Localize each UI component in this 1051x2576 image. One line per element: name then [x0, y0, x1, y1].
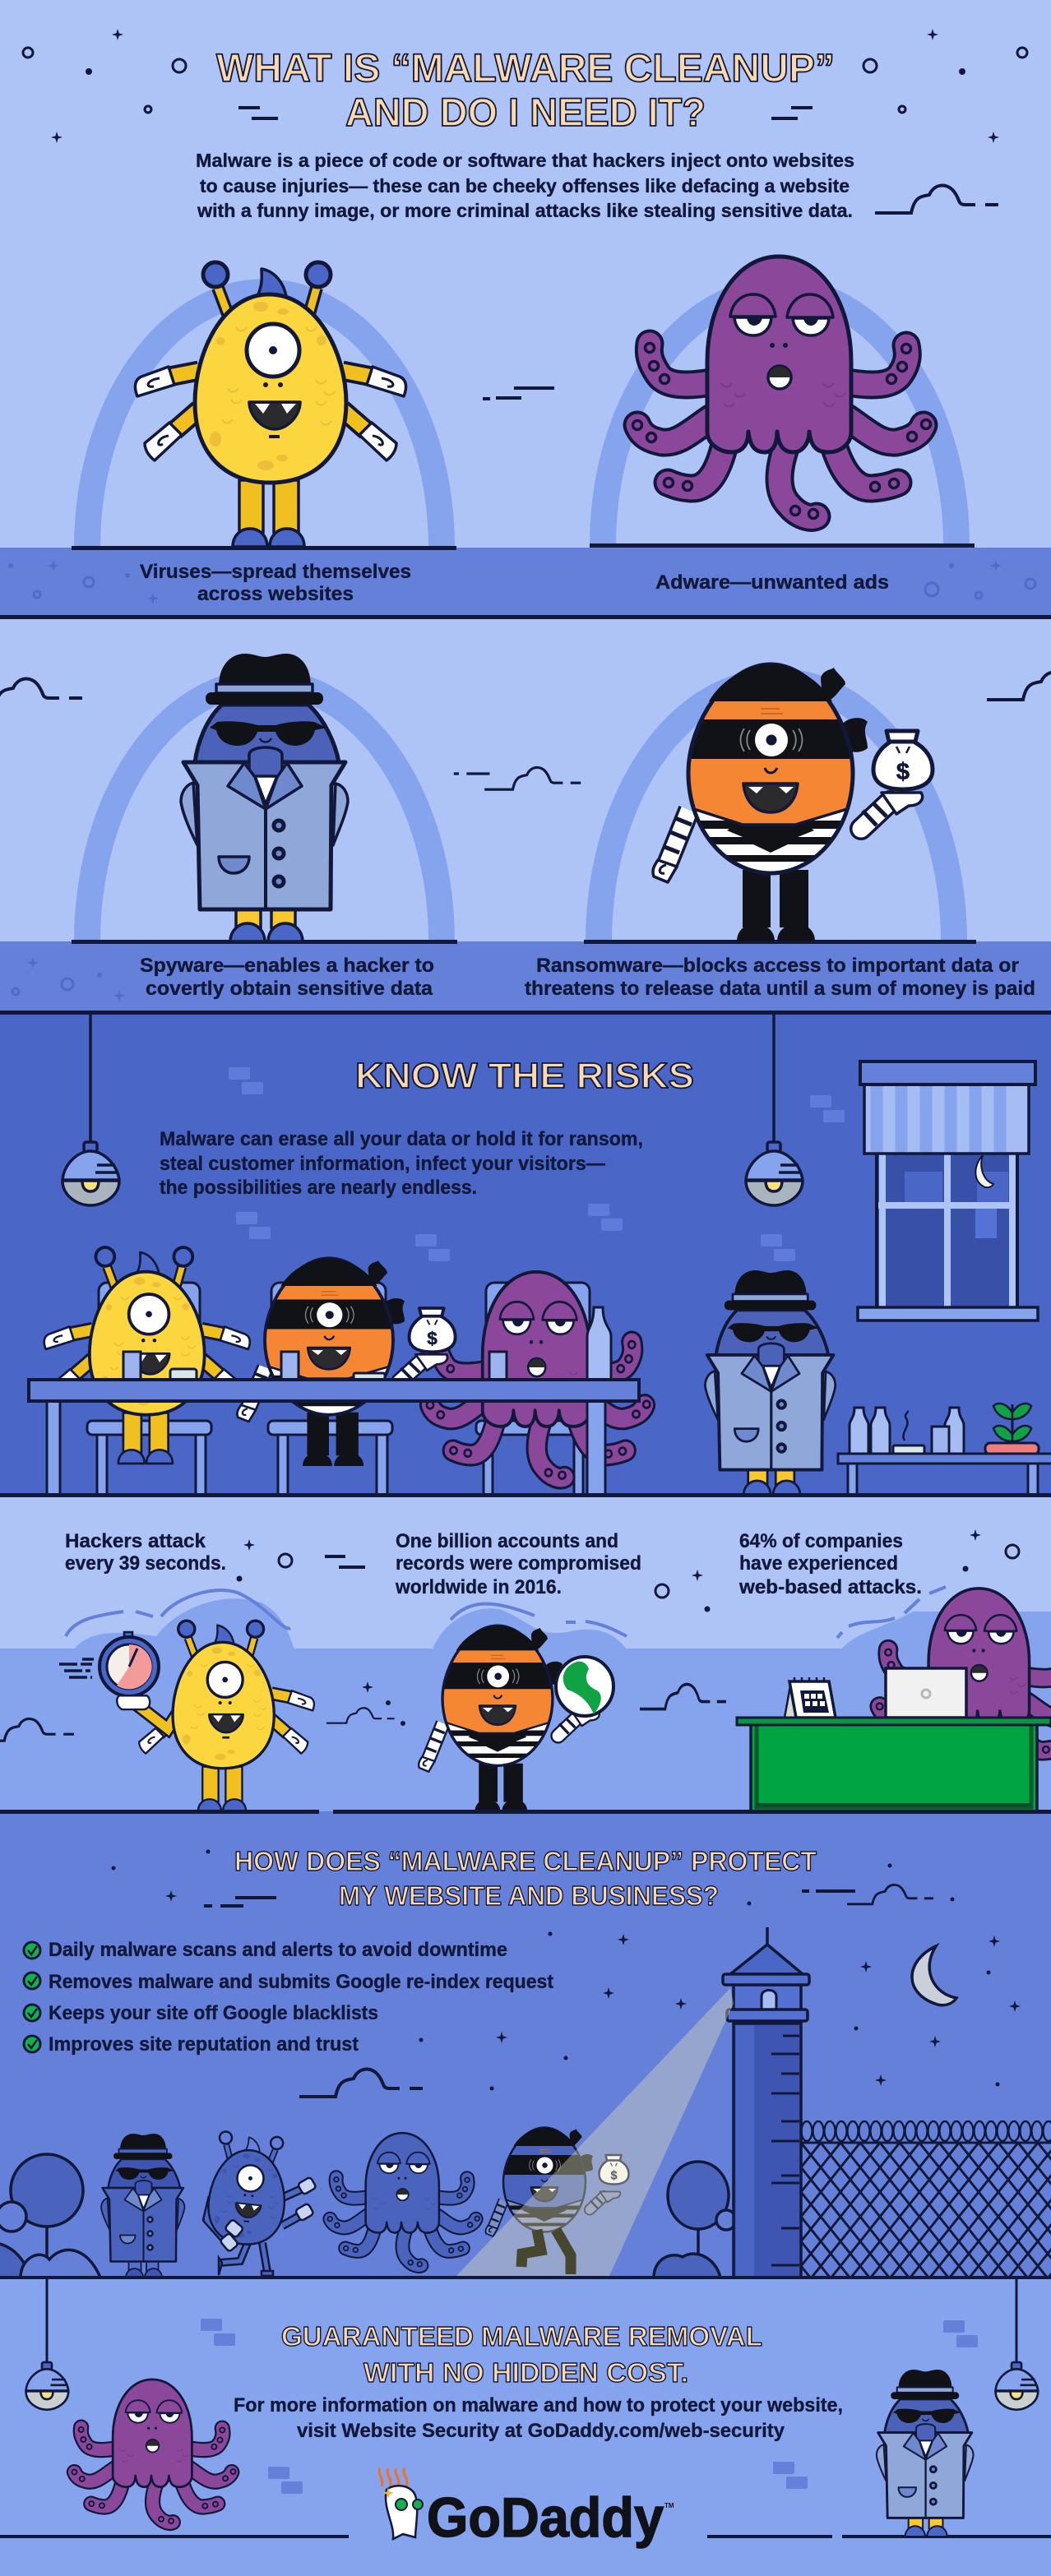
character: footer octopus	[72, 2379, 235, 2523]
character: spy	[181, 654, 348, 941]
GoDaddy logo: TM	[664, 2502, 674, 2509]
character: virus with stopwatch	[117, 1621, 314, 1811]
window	[858, 1061, 1038, 1320]
spotlight beam	[456, 1988, 734, 2276]
caption: ransomware	[525, 955, 1035, 1000]
band decoration	[8, 560, 1035, 1001]
footer text block	[234, 2394, 843, 2442]
chairs	[87, 1283, 590, 1495]
ground line: ransomware	[584, 940, 976, 944]
icon: clouds in night sky	[299, 1885, 933, 2097]
risks text block: steal customer information, infect your visitors—	[160, 1153, 605, 1175]
character: spy standing	[705, 1270, 836, 1495]
intro text block: Malware is a piece of code or software that hackers inject onto websites	[196, 150, 854, 171]
character: thief at table	[237, 1253, 456, 1466]
checklist	[24, 1939, 553, 2056]
heading: guaranteed removal: WITH NO HIDDEN COST.	[363, 2357, 688, 2388]
stat text: companies attacked: 64% of companies	[739, 1530, 903, 1552]
side shelf with bottles and plant	[838, 1404, 1051, 1495]
section divider	[0, 1011, 1051, 1015]
night sky decoration	[112, 1850, 1021, 2090]
title: WHAT IS “MALWARE CLEANUP”	[216, 47, 835, 90]
caption: spyware: Spyware—enables a hacker to	[140, 955, 434, 977]
fence with razor wire	[801, 2119, 1051, 2278]
stat text: attack frequency: Hackers attack	[65, 1530, 206, 1552]
arch behind virus	[87, 292, 442, 548]
background: intro section	[0, 0, 1051, 1012]
lamp left	[63, 1012, 119, 1205]
heading: know the risks: KNOW THE RISKS	[355, 1056, 694, 1096]
character: virus	[135, 262, 406, 547]
icon: cloud lower left	[0, 1718, 74, 1741]
intro text block: with a funny image, or more criminal attacks like stealing sensitive data.	[197, 200, 853, 221]
panel: statistics ground	[0, 1649, 1051, 1811]
band: virus and adware captions	[0, 548, 1051, 617]
footer ground lines	[0, 2535, 1051, 2538]
stat text: attack frequency: every 39 seconds.	[65, 1552, 226, 1575]
caption: spyware	[140, 955, 434, 1000]
laptop	[886, 1668, 966, 1718]
stats hill outlines	[66, 1587, 946, 1638]
arch behind adware	[603, 290, 956, 545]
icon: small cloud mid	[326, 1708, 395, 1723]
character: adware octopus	[633, 257, 931, 518]
caption: spyware: covertly obtain sensitive data	[146, 978, 433, 1000]
character: virus at table	[44, 1247, 250, 1464]
arch behind thief	[599, 682, 954, 941]
caption: adware: Adware—unwanted ads	[655, 571, 889, 594]
risks text block: Malware can erase all your data or hold it for ransom,	[160, 1128, 643, 1150]
stat text: compromised accounts	[395, 1530, 641, 1598]
intro text block	[196, 150, 854, 221]
decorative wall bricks	[229, 1067, 845, 1261]
heading: how does malware cleanup protect: MY WEBSITE AND BUSINESS?	[339, 1880, 719, 1911]
heading: guaranteed removal: GUARANTEED MALWARE REMOVAL	[281, 2321, 762, 2352]
caption: viruses: across websites	[197, 583, 354, 605]
section divider	[0, 1493, 1051, 1497]
risks text block	[160, 1128, 643, 1199]
heading: how does malware cleanup protect	[234, 1846, 817, 1911]
footer lamp right	[995, 2279, 1038, 2410]
intro text block: to cause injuries— these can be cheeky offenses like defacing a website	[200, 175, 850, 197]
panel: footer background	[0, 2278, 1051, 2576]
stat text: compromised accounts: records were compromised	[396, 1552, 641, 1575]
title	[216, 47, 835, 135]
footer text block: visit Website Security at GoDaddy.com/web-security	[297, 2420, 785, 2442]
character: octopus at desk	[877, 1589, 1051, 1772]
section divider	[0, 615, 1051, 619]
stats decoration	[237, 1529, 1019, 1726]
band: spyware and ransomware captions	[0, 941, 1051, 1012]
trees and bushes	[0, 2154, 736, 2278]
calendar	[785, 1677, 836, 1718]
decorative stars and rings at top	[23, 29, 1027, 399]
icon: cloud top right	[875, 186, 998, 213]
character: night thief running	[485, 2125, 628, 2236]
footer decorative bricks	[201, 2319, 978, 2494]
moon	[912, 1946, 956, 2005]
icon: cloud left partial	[0, 679, 82, 706]
heading: guaranteed removal	[281, 2321, 762, 2388]
ground line: stats	[0, 1810, 1051, 1814]
tower	[723, 1927, 809, 2278]
GoDaddy logo: GoDaddy	[427, 2486, 664, 2549]
stopwatch	[59, 1632, 159, 1696]
caption: viruses: Viruses—spread themselves	[140, 561, 411, 583]
globe	[556, 1657, 613, 1716]
lamp right	[746, 1012, 803, 1205]
caption: ransomware: Ransomware—blocks access to important data or	[536, 955, 1019, 977]
character: ransomware thief	[653, 658, 933, 941]
stats hills	[74, 1598, 1051, 1649]
panel: statistics sky	[0, 1495, 1051, 1651]
heading: how does malware cleanup protect: HOW DOES “MALWARE CLEANUP” PROTECT	[234, 1846, 817, 1876]
caption: viruses	[140, 561, 411, 605]
caption: ransomware: threatens to release data until a sum of money is paid	[525, 978, 1035, 1000]
icon: small cloud right	[640, 1684, 726, 1709]
stat text: companies attacked	[738, 1530, 922, 1598]
arch behind spy	[87, 682, 442, 941]
ground line: virus	[72, 546, 456, 550]
checklist: Daily malware scans and alerts to avoid downtime	[49, 1939, 507, 1961]
character: night virus running	[205, 2130, 317, 2276]
character: night octopus	[327, 2133, 479, 2267]
checklist: Removes malware and submits Google re-index request	[49, 1971, 553, 1993]
title: AND DO I NEED IT?	[345, 91, 706, 135]
table	[29, 1307, 639, 1495]
stat text: companies attacked: have experienced	[739, 1552, 898, 1575]
panel: know the risks background	[0, 1012, 1051, 1495]
ground line: adware	[590, 543, 975, 548]
character: thief with globe	[419, 1621, 600, 1811]
GoDaddy logo	[379, 2468, 674, 2549]
panel: protection section background	[0, 1811, 1051, 2278]
desk	[737, 1718, 1051, 1811]
checklist: Improves site reputation and trust	[49, 2033, 359, 2056]
character: footer spy	[877, 2370, 974, 2537]
ground line: spyware	[72, 940, 457, 944]
stat text: companies attacked: web-based attacks.	[738, 1576, 922, 1598]
footer text block: For more information on malware and how to protect your website,	[234, 2394, 843, 2416]
stat text: attack frequency	[65, 1530, 226, 1575]
character: night spy	[101, 2134, 184, 2278]
icon: cloud right partial	[987, 673, 1051, 700]
stat text: compromised accounts: worldwide in 2016.	[395, 1576, 562, 1598]
risks text block: the possibilities are nearly endless.	[160, 1177, 477, 1199]
ground line: protection section	[0, 2276, 1051, 2279]
checklist: Keeps your site off Google blacklists	[49, 2002, 378, 2024]
character: octopus at table	[427, 1272, 650, 1479]
icon: cloud centre	[454, 767, 581, 789]
footer lamp left	[26, 2279, 68, 2410]
running legs of night thief	[521, 2230, 571, 2274]
stat text: compromised accounts: One billion accounts and	[396, 1530, 618, 1552]
